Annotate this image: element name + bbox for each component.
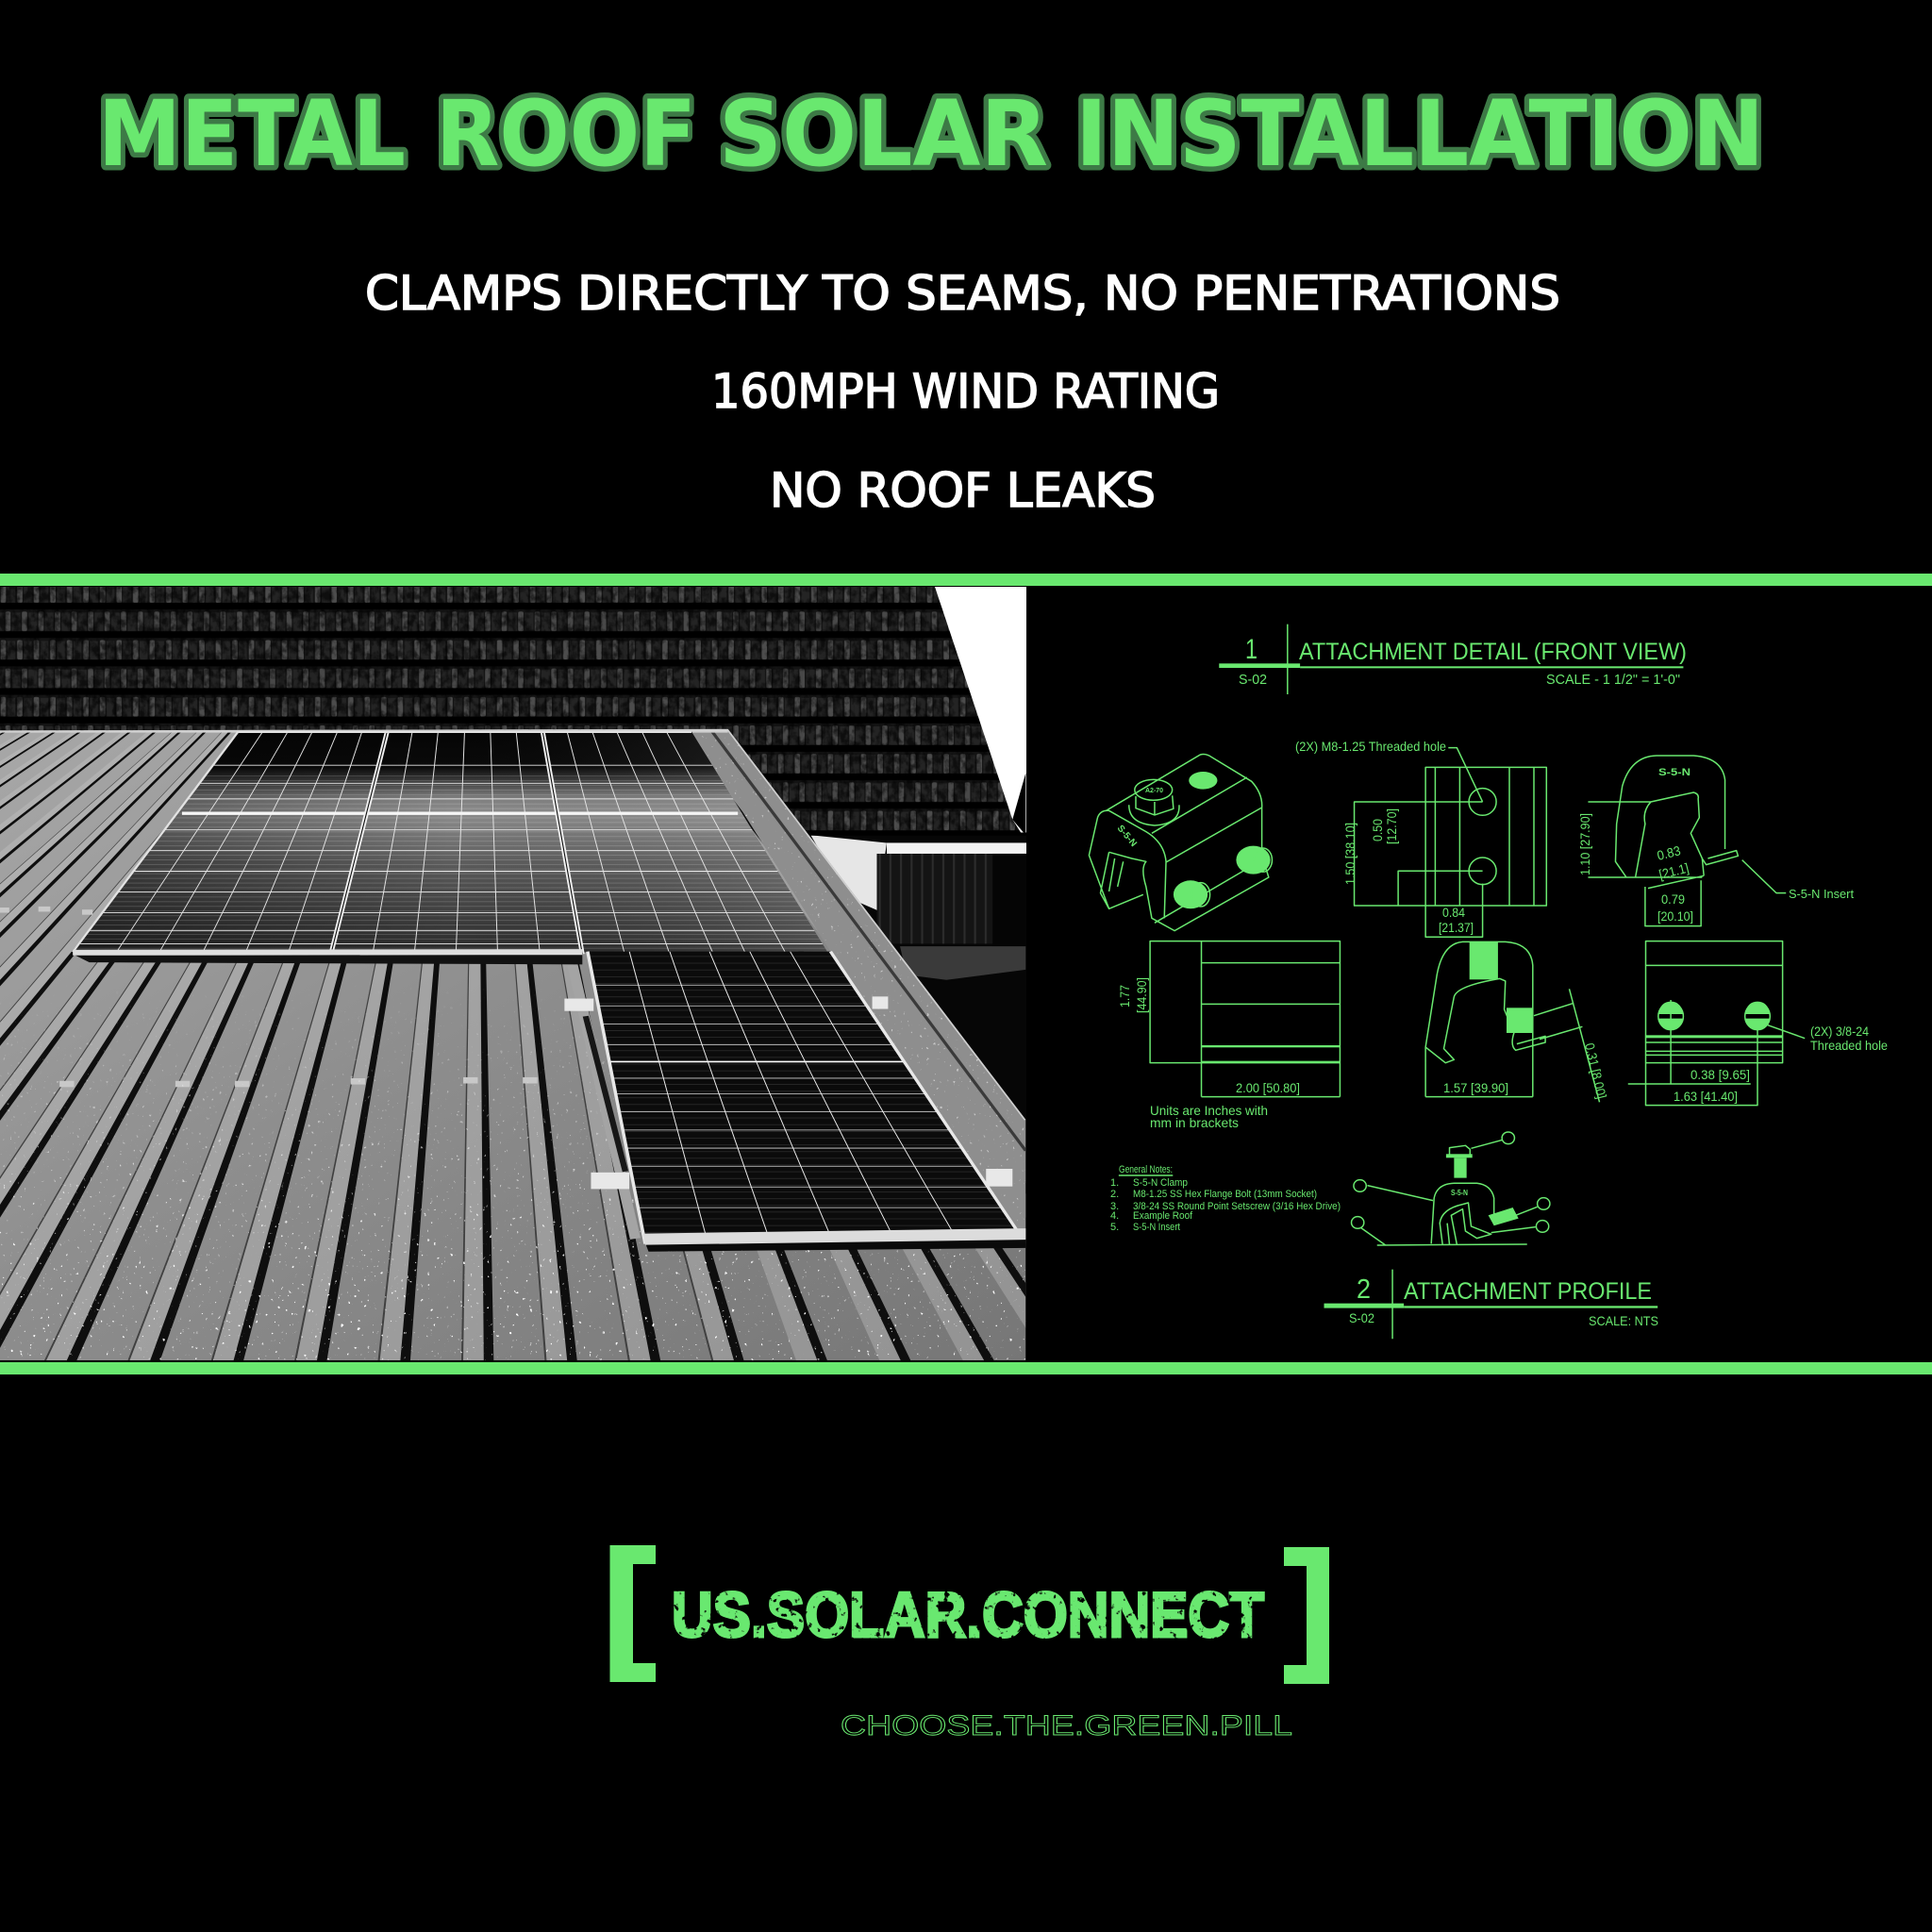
dimension labels: upper row: 0.79 [1661,891,1685,907]
heading rules [1287,625,1289,694]
general notes [1110,1164,1468,1233]
heading rules 2 [1119,1175,1392,1339]
dimension labels: upper row: [21.1] [1657,860,1690,882]
dimension labels: lower row: 1.57 [39.90] [1443,1080,1508,1095]
feature list [365,266,1560,518]
roof seam studs [0,907,538,1087]
general notes: 3. [1110,1201,1119,1212]
speckles [0,980,1032,1363]
neighbouring building [809,832,1026,980]
dimension labels: lower row: 1.77 [1117,985,1132,1008]
attachment detail drawings [1089,625,1786,937]
photo: solar panels on metal roof [0,587,1026,1360]
general notes: 4. [1110,1210,1119,1222]
profile heading [1349,1274,1658,1328]
dimension labels: upper row: [12.70] [1384,808,1399,844]
dimension labels: lower row: 2.00 [50.80] [1236,1080,1300,1095]
dimension labels: lower row: (2X) 3/8-24 [1810,1024,1869,1039]
title: ROOF [436,81,696,187]
general notes: General Notes: [1119,1164,1173,1175]
dimension labels: upper row: A2-70 [1145,788,1163,794]
feature: wind rating: 160MPH WIND RATING [711,364,1220,419]
profile heading: SCALE: NTS [1589,1313,1658,1328]
metal roof [0,728,1026,1360]
top green bar [0,574,1932,586]
detail heading: ATTACHMENT DETAIL (FRONT VIEW) [1299,639,1687,665]
sky [935,587,1026,832]
logo wordmark: US.SOLAR.CONNECT [672,1579,1264,1651]
general notes: 5. [1110,1222,1119,1233]
roof ribs: thin secondary lines [0,730,713,1360]
panel frames [181,811,738,815]
title: INSTALLATION [1075,81,1764,187]
detail heading: 1 [1245,634,1257,665]
icon: side view of clamp [1588,756,1786,926]
dimension labels: lower row: Threaded hole [1810,1038,1888,1053]
general notes: M8-1.25 SS Hex Flange Bolt (13mm Socket) [1133,1189,1317,1200]
dimension labels: upper row: 0.83 [1656,842,1682,863]
dimension labels: upper row: S-5-N Insert [1789,887,1854,901]
icon: right bracket [1284,1547,1329,1684]
dimension labels: upper row: (2X) M8-1.25 Threaded hole [1295,739,1446,754]
dimension labels: lower row: 0.31 [8.00] [1582,1041,1609,1100]
mounting brackets [564,996,1012,1189]
icon: clamp rear view [1628,941,1805,1106]
dimension labels: upper row: 1.10 [27.90] [1577,813,1592,875]
icon: clamp top view [1150,941,1340,1097]
title [98,81,1764,187]
general notes: S-5-N [1451,1189,1468,1197]
icon: isometric clamp [1089,755,1272,931]
icon: assembly profile [1352,1132,1550,1245]
general notes: S-5-N Clamp [1133,1177,1188,1189]
icon: clamp section [1425,941,1600,1102]
dimension labels: upper row: S-5-N [1115,824,1139,849]
title: METAL [98,81,406,187]
general notes: Example Roof [1133,1210,1193,1222]
lower panel [562,952,1032,1246]
mounting rail [573,964,635,1239]
general notes: S-5-N Insert [1133,1222,1180,1233]
lower drawings [1119,941,1805,1339]
right flashing [741,748,1026,1228]
profile heading: S-02 [1349,1310,1374,1325]
profile heading: 2 [1357,1274,1371,1305]
dimension labels: lower row: [44.90] [1134,977,1149,1013]
tagline: CHOOSE.THE.GREEN.PILL [841,1710,1292,1741]
ridge strip [0,728,728,733]
icon: left bracket [609,1545,656,1682]
title: SOLAR [719,81,1048,187]
dimension labels: upper row [1115,739,1854,935]
tile roof [0,581,1025,835]
panel: attachment drawings [1089,625,1888,1339]
icon: front view of clamp [1355,748,1546,937]
detail heading: S-02 [1239,672,1267,688]
dimension labels: upper row: [21.37] [1439,920,1474,935]
profile heading: ATTACHMENT PROFILE [1404,1278,1652,1305]
general notes: 1. [1110,1177,1119,1189]
feature: no leaks: NO ROOF LEAKS [770,463,1156,518]
dimension labels: upper row: S-5-N [1658,767,1690,778]
dimension labels: lower row: Units are Inches with [1150,1103,1268,1118]
dimension labels: upper row: 1.50 [38.10] [1342,823,1357,885]
dimension labels: lower row: 0.38 [9.65] [1690,1067,1750,1082]
feature: clamps: CLAMPS DIRECTLY TO SEAMS, NO PENETRATIONS [365,266,1560,321]
dimension labels: lower row: mm in brackets [1150,1115,1239,1130]
detail heading: SCALE - 1 1/2" = 1'-0" [1546,672,1680,688]
general notes: 2. [1110,1189,1119,1200]
upper panel array [72,731,827,956]
logo [609,1545,1329,1741]
dimension labels: upper row: [20.10] [1657,908,1693,924]
general notes: 3/8-24 SS Round Point Setscrew (3/16 Hex Drive) [1133,1201,1341,1212]
vertical cell lines [115,732,786,954]
dimension labels: upper row: 0.84 [1442,905,1465,920]
dimension labels: lower row [1117,977,1888,1130]
dimension labels: lower row: 1.63 [41.40] [1674,1089,1738,1104]
roof ribs: dark bands [0,729,1026,1360]
roof ribs: light bands [0,729,1026,1360]
dimension labels: upper row: 0.50 [1370,819,1385,841]
panel shadows [73,954,582,964]
bottom green bar [0,1362,1932,1374]
detail heading [1239,634,1687,688]
